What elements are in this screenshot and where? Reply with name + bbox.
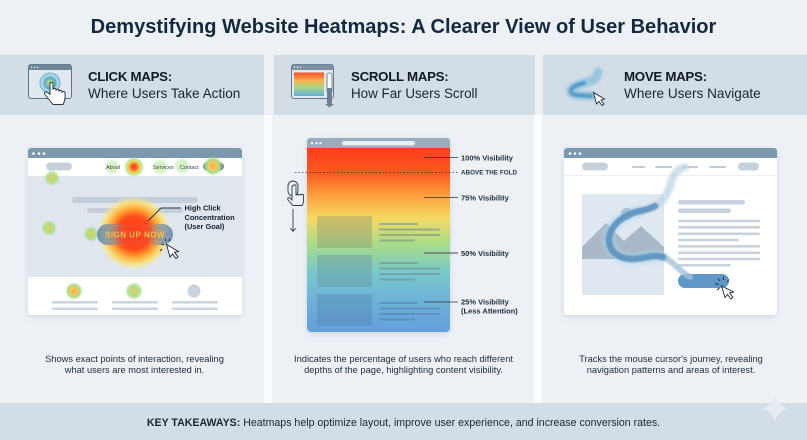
scroll maps subheading: How Far Users Scroll bbox=[351, 86, 478, 101]
label: 25% visibility bbox=[424, 298, 518, 316]
text lines bbox=[678, 200, 760, 267]
call to action button bbox=[678, 274, 729, 288]
panel: move maps bbox=[542, 55, 807, 403]
label: 75% visibility: 75% Visibility bbox=[461, 194, 510, 202]
move maps description: Tracks the mouse cursor's journey, revealing bbox=[579, 354, 763, 364]
move maps heading: MOVE MAPS: bbox=[624, 69, 707, 84]
title: Demystifying Website Heatmaps: A Clearer View of User Behavior bbox=[91, 16, 717, 38]
scroll maps description: depths of the page, highlighting content visibility. bbox=[304, 365, 503, 375]
heat spots bbox=[41, 156, 223, 300]
move maps description: navigation patterns and areas of interest. bbox=[587, 365, 755, 375]
above the fold line: ABOVE THE FOLD bbox=[461, 170, 517, 176]
sign up button label: SIGN UP NOW bbox=[105, 230, 165, 240]
icon: sparkle bbox=[762, 395, 788, 422]
movement trail bbox=[609, 167, 706, 281]
key takeaways: KEY TAKEAWAYS: Heatmaps help optimize layout, improve user experience, and increase conversion rates. bbox=[147, 417, 660, 429]
click maps description: Shows exact points of interaction, revealing bbox=[45, 354, 224, 364]
scroll maps header band bbox=[274, 55, 535, 115]
label: 25% visibility: 25% Visibility bbox=[461, 298, 510, 306]
white gutter between panels bbox=[534, 115, 542, 403]
nav labels: Services bbox=[153, 165, 174, 171]
move maps subheading: Where Users Navigate bbox=[624, 86, 761, 101]
icon: cursor bbox=[160, 238, 178, 258]
label: 100% visibility bbox=[424, 154, 514, 162]
chart: scroll heatmap browser bbox=[307, 138, 450, 332]
nav labels bbox=[106, 165, 199, 171]
icon: cursor with click sparks bbox=[715, 276, 734, 299]
callout: high click concentration: High Click bbox=[184, 204, 222, 212]
content blocks bbox=[317, 216, 372, 326]
label: 75% visibility bbox=[424, 194, 510, 202]
label: 25% visibility: (Less Attention) bbox=[461, 306, 518, 316]
label: 100% visibility: 100% Visibility bbox=[461, 154, 514, 162]
nav labels: Contact bbox=[180, 165, 199, 171]
click maps header band bbox=[0, 55, 264, 115]
icon: move path and cursor bbox=[571, 72, 604, 106]
label: 50% visibility: 50% Visibility bbox=[461, 249, 510, 258]
callout: high click concentration bbox=[148, 204, 235, 231]
scroll maps description: Indicates the percentage of users who reach different bbox=[294, 354, 513, 364]
click maps subheading: Where Users Take Action bbox=[88, 86, 240, 101]
icon: scroll mouse hand bbox=[288, 181, 304, 231]
image placeholder bbox=[582, 194, 664, 295]
footer band bbox=[0, 395, 807, 440]
move maps header band bbox=[543, 55, 807, 115]
click maps heading: CLICK MAPS: bbox=[88, 69, 172, 84]
click maps description: what users are most interested in. bbox=[64, 365, 204, 375]
panel: scroll maps bbox=[272, 55, 535, 403]
chart: click heatmap browser bbox=[28, 148, 242, 315]
scroll maps heading: SCROLL MAPS: bbox=[351, 69, 448, 84]
sign up button bbox=[97, 224, 173, 245]
icon: click browser bbox=[28, 64, 72, 104]
callout: high click concentration: (User Goal) bbox=[184, 222, 225, 231]
label: 50% visibility bbox=[424, 249, 510, 258]
nav labels: About bbox=[106, 165, 121, 171]
white gutter between panels bbox=[264, 115, 272, 403]
icon: scroll browser bbox=[292, 64, 334, 108]
callout: high click concentration: Concentration bbox=[184, 213, 235, 222]
panel: click maps bbox=[0, 55, 264, 403]
chart: move map browser bbox=[564, 148, 777, 315]
